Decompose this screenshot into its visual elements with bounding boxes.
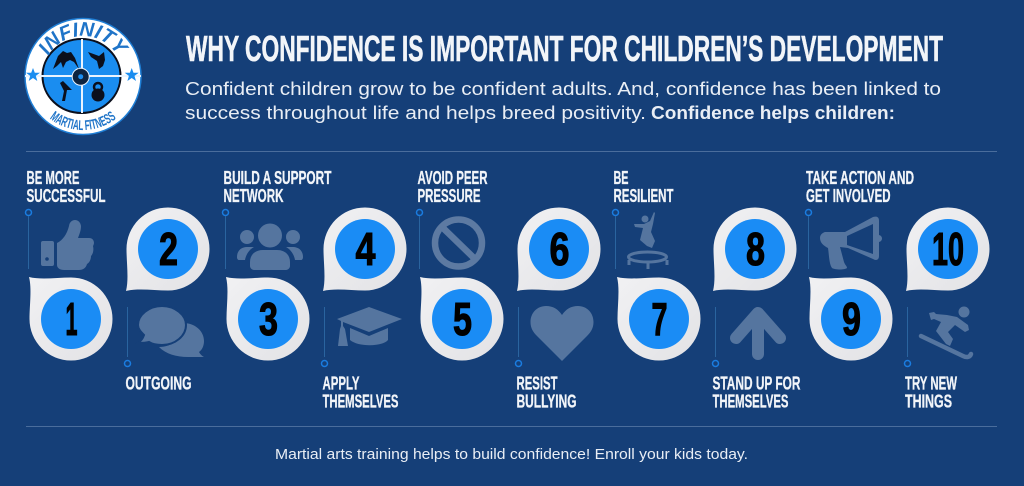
item 7: be resilient: BE bbox=[614, 168, 628, 188]
item 8: stand up for themselves: STAND UP FOR bbox=[712, 374, 800, 394]
item 9: take action and get involved: GET INVOLVED bbox=[806, 186, 890, 206]
footer text: Martial arts training helps to build confidence! Enroll your kids today. bbox=[275, 447, 748, 463]
item 2: outgoing bbox=[124, 208, 210, 394]
item 5: avoid peer pressure bbox=[416, 168, 504, 360]
item 7: be resilient: 7 bbox=[652, 293, 668, 345]
item 5: avoid peer pressure: PRESSURE bbox=[418, 186, 480, 206]
item 1: be more successful bbox=[26, 168, 112, 360]
intro text: Confident children grow to be confident adults. And, confidence has been linked to bbox=[185, 78, 941, 99]
item 6: resist bullying: RESIST bbox=[516, 374, 558, 394]
intro text: success throughout life and helps breed positivity. bbox=[185, 102, 646, 123]
item 7: be resilient: RESILIENT bbox=[614, 186, 674, 206]
item 1: be more successful: SUCCESSFUL bbox=[26, 186, 106, 206]
item 9: take action and get involved: 9 bbox=[842, 293, 861, 345]
item 3: build a support network: NETWORK bbox=[224, 186, 284, 206]
item 5: avoid peer pressure: AVOID PEER bbox=[418, 168, 488, 188]
item 10: try new things: 10 bbox=[932, 223, 964, 275]
intro text: Confidence helps children: bbox=[651, 102, 895, 123]
item 2: outgoing: 2 bbox=[159, 223, 178, 275]
logo: Infinity Martial Fitness bbox=[24, 18, 142, 136]
item 3: build a support network: 3 bbox=[259, 293, 278, 345]
item 3: build a support network bbox=[222, 168, 332, 360]
logo: Infinity Martial Fitness: INFINITY bbox=[38, 22, 130, 56]
item 1: be more successful: BE MORE bbox=[26, 168, 80, 188]
item 8: stand up for themselves bbox=[712, 208, 800, 412]
icon: no sign bbox=[435, 220, 482, 266]
icon: trampoline bbox=[628, 212, 667, 269]
item 10: try new things: TRY NEW bbox=[905, 374, 957, 394]
item 1: be more successful: 1 bbox=[66, 293, 78, 345]
item 4: apply themselves bbox=[322, 208, 406, 412]
item 6: resist bullying: 6 bbox=[550, 223, 570, 275]
logo: Infinity Martial Fitness: MARTIAL FITNESS bbox=[50, 110, 116, 130]
item 4: apply themselves: THEMSELVES bbox=[322, 392, 398, 412]
item 3: build a support network: BUILD A SUPPORT bbox=[224, 168, 332, 188]
item 5: avoid peer pressure: 5 bbox=[453, 293, 472, 345]
item 9: take action and get involved bbox=[806, 168, 914, 360]
item 2: outgoing: OUTGOING bbox=[126, 374, 192, 394]
item 7: be resilient bbox=[612, 168, 700, 360]
item 8: stand up for themselves: 8 bbox=[746, 223, 765, 275]
item 10: try new things bbox=[904, 208, 990, 412]
item 4: apply themselves: APPLY bbox=[322, 374, 360, 394]
item 10: try new things: THINGS bbox=[905, 392, 952, 412]
item 8: stand up for themselves: THEMSELVES bbox=[712, 392, 788, 412]
item 9: take action and get involved: TAKE ACTION AND bbox=[806, 168, 914, 188]
item 6: resist bullying: BULLYING bbox=[516, 392, 576, 412]
item 6: resist bullying bbox=[516, 208, 600, 412]
intro text bbox=[185, 78, 941, 123]
item 4: apply themselves: 4 bbox=[356, 223, 376, 275]
